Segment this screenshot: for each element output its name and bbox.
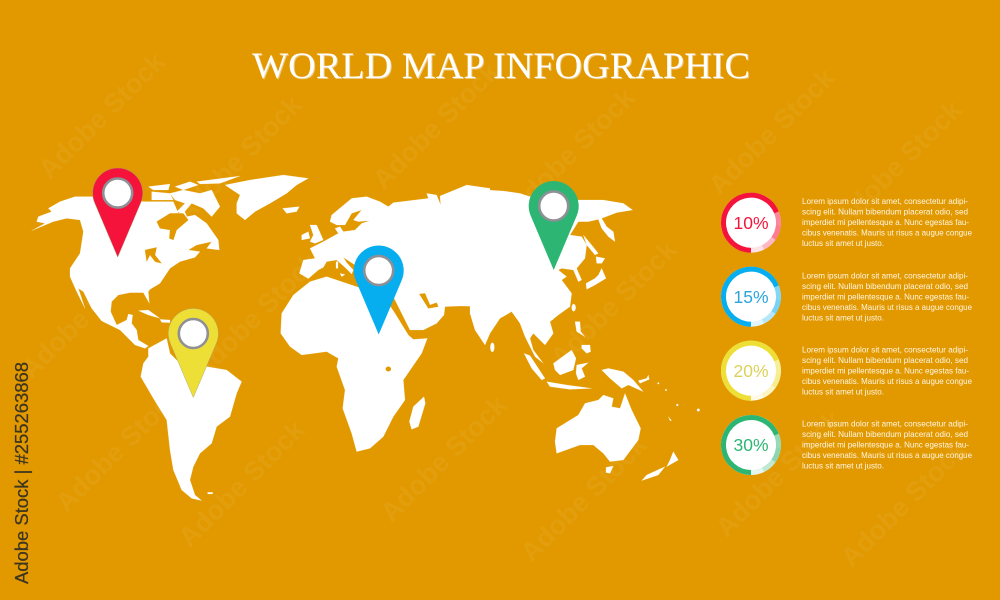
gauge: 15%: 15% (733, 287, 769, 307)
text block: 20% description: Lorem ipsum dolor sit amet, consectetur adipi- (802, 345, 968, 355)
watermark pattern: Adobe Stock (173, 414, 311, 553)
text block: 30% description: imperdiet mi pellentesque a. Nunc egestas fau- (802, 440, 969, 450)
watermark pattern: Adobe Stock (835, 434, 973, 573)
text block: 10% description: luctus sit amet ut justo. (802, 238, 884, 248)
text block: 15% description: scing elit. Nullam bibendum placerat odio, sed (802, 281, 968, 291)
watermark pattern: Adobe Stock (15, 246, 153, 385)
text block: 30% description: luctus sit amet ut justo. (802, 461, 884, 471)
world map (32, 175, 700, 501)
pin: North America (red) (93, 168, 143, 257)
text block: 10% description: cibus venenatis. Mauris ut risus a augue congue (802, 228, 972, 238)
gauge: 10%: 10% (733, 213, 769, 233)
watermark pattern: Adobe Stock (710, 404, 848, 543)
text block: 10% description: imperdiet mi pellentesque a. Nunc egestas fau- (802, 217, 969, 227)
gauge: 15% (721, 267, 781, 327)
text block: 30% description: cibus venenatis. Mauris ut risus a augue congue (802, 450, 972, 460)
watermark pattern: Adobe Stock (545, 234, 683, 373)
watermark pattern: Adobe Stock (170, 89, 308, 228)
text block: 30% description: scing elit. Nullam bibendum placerat odio, sed (802, 429, 968, 439)
pin: Asia (green) (529, 181, 579, 270)
watermark pattern: Adobe Stock (503, 82, 641, 221)
text block: 15% description: luctus sit amet ut justo. (802, 312, 884, 322)
text block: 10% description (802, 196, 972, 248)
map: North America (32, 176, 240, 494)
text block: 20% description (802, 345, 972, 397)
text block: 15% description: imperdiet mi pellentesque a. Nunc egestas fau- (802, 291, 969, 301)
map: eastern Asia and Indonesia (470, 190, 633, 389)
text block: 15% description: Lorem ipsum dolor sit amet, consectetur adipi- (802, 270, 968, 280)
gauge: 30%: 30% (733, 435, 769, 455)
watermark pattern: Adobe Stock (367, 56, 505, 195)
map: South America (141, 338, 242, 501)
watermark pattern: Adobe Stock (50, 379, 188, 518)
text block: 15% description: cibus venenatis. Mauris ut risus a augue congue (802, 302, 972, 312)
title: WORLD MAP INFOGRAPHIC (252, 46, 750, 87)
map: Europe and western Asia (299, 185, 490, 330)
watermark pattern: Adobe Stock (830, 94, 968, 233)
watermark pattern: Adobe Stock (33, 46, 171, 185)
text block: 30% description (802, 419, 972, 471)
vertical stock credit: Adobe Stock | #255263868 (12, 362, 32, 584)
map: Greenland and Iceland (225, 175, 308, 220)
text block: 20% description: cibus venenatis. Mauris ut risus a augue congue (802, 376, 972, 386)
text block: 20% description: imperdiet mi pellentesque a. Nunc egestas fau- (802, 366, 969, 376)
watermark pattern: Adobe Stock (515, 429, 653, 568)
text block: 30% description: Lorem ipsum dolor sit amet, consectetur adipi- (802, 419, 968, 429)
gauge: 10% (721, 193, 781, 253)
text block: 10% description: scing elit. Nullam bibendum placerat odio, sed (802, 206, 968, 216)
pin: Africa (blue) (354, 246, 404, 334)
gauge: 20%: 20% (733, 361, 769, 381)
watermark pattern: Adobe Stock (187, 246, 325, 385)
watermark pattern: Adobe Stock (375, 389, 513, 528)
text block: 10% description: Lorem ipsum dolor sit amet, consectetur adipi- (802, 196, 968, 206)
text block: 20% description: luctus sit amet ut justo. (802, 387, 884, 397)
gauge: 20% (721, 341, 781, 401)
gauge: 30% (721, 415, 781, 475)
pin: South America (yellow) (168, 309, 218, 398)
watermark pattern: Adobe Stock (703, 62, 841, 201)
text block: 15% description (802, 270, 972, 322)
text block: 20% description: scing elit. Nullam bibendum placerat odio, sed (802, 355, 968, 365)
map: Africa and Oceania (281, 277, 700, 481)
